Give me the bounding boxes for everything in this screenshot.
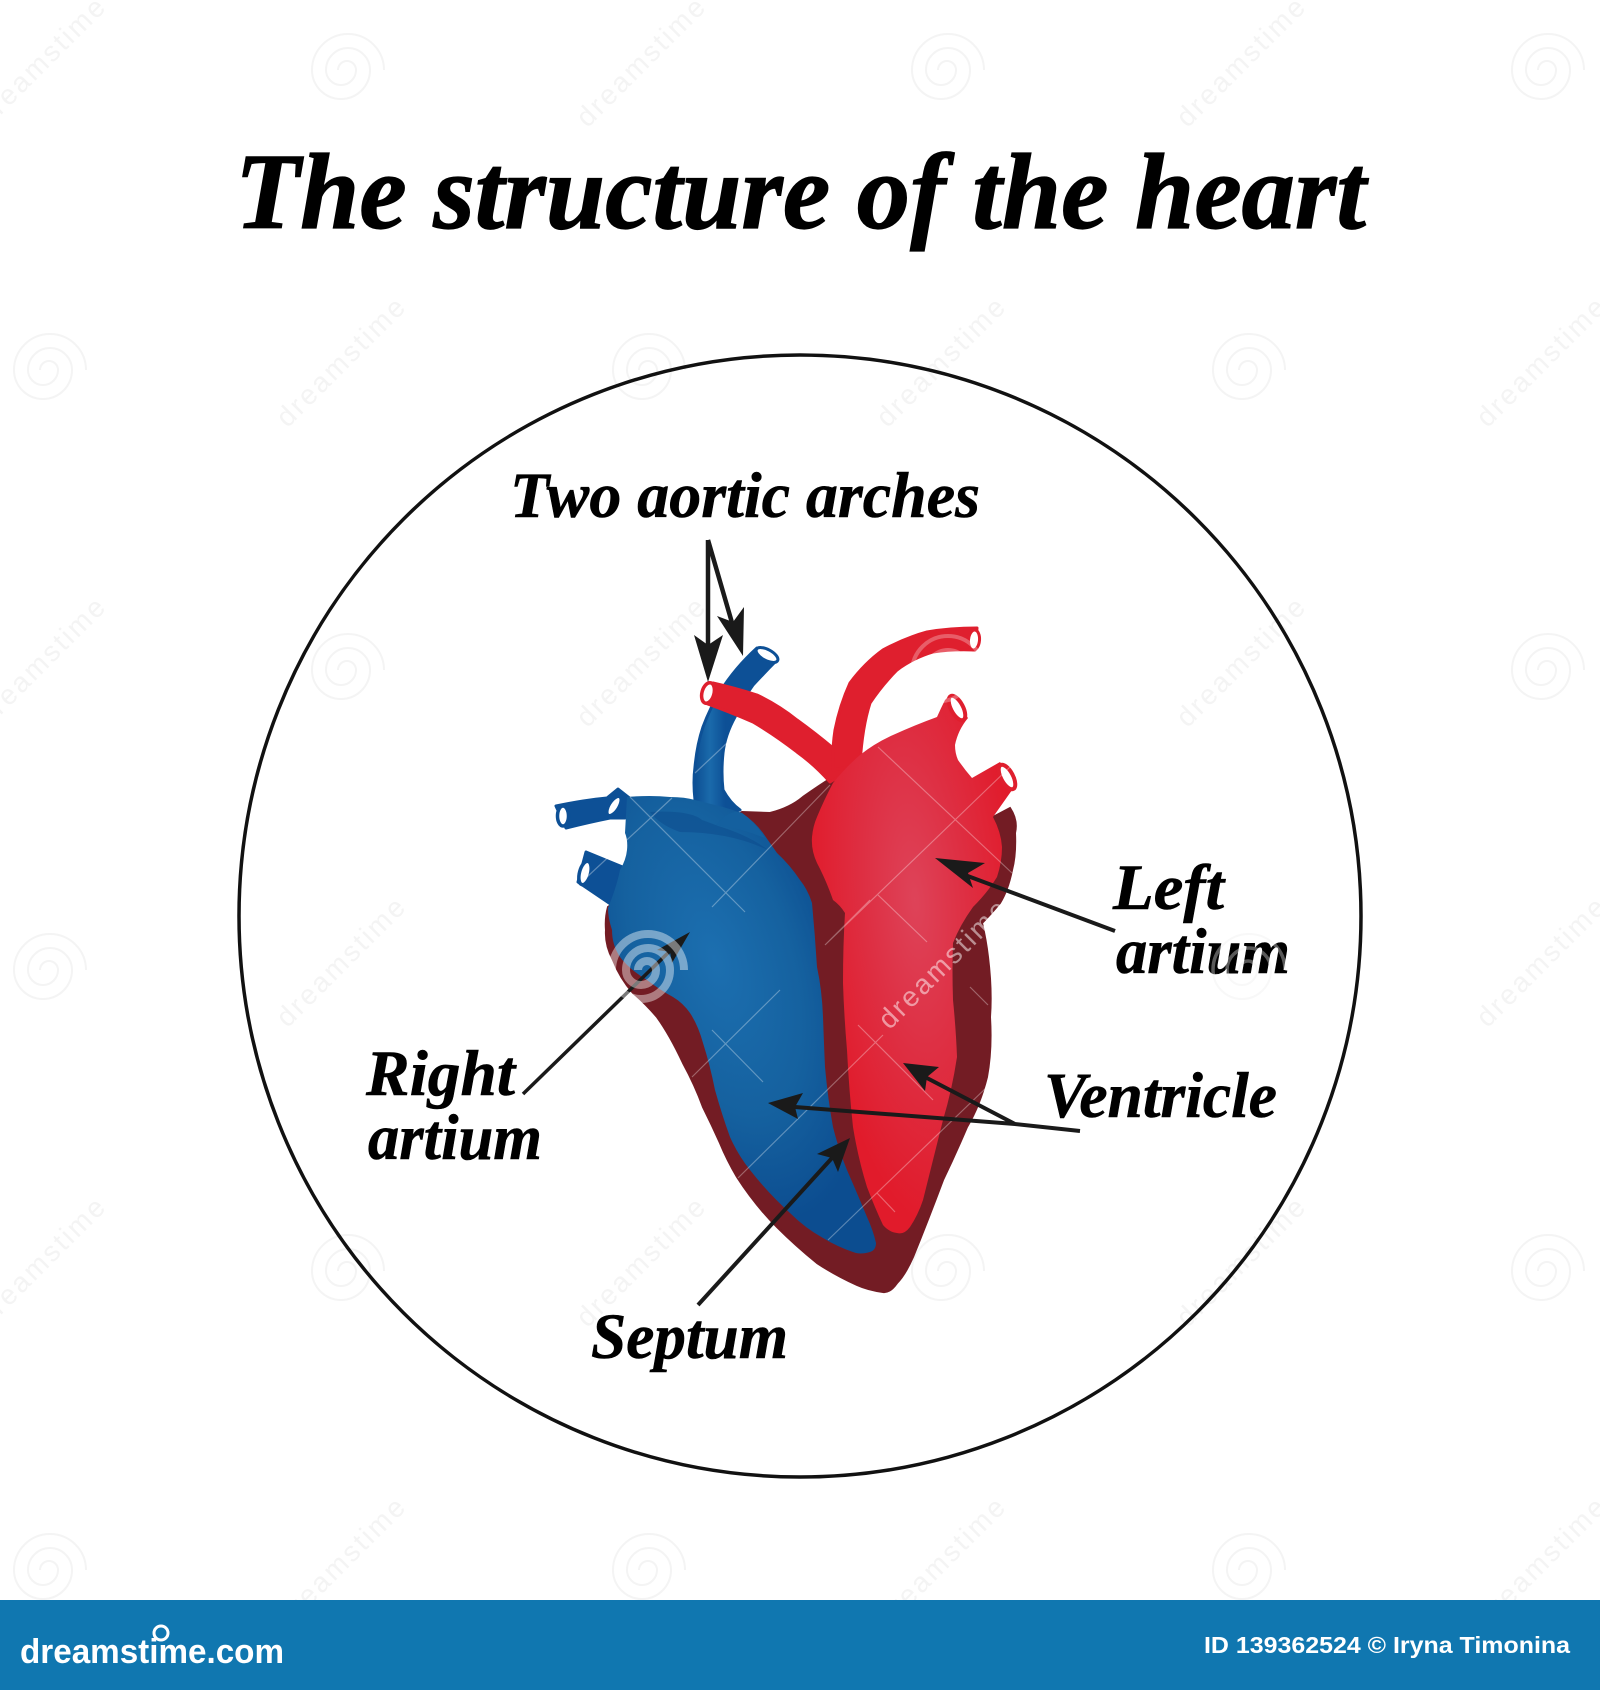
label: left artium: artium [1116,916,1290,988]
label: two aortic arches: Two aortic arches [510,460,980,532]
watermark pattern: dreamstime [870,290,1013,433]
heart watermark overlays [612,636,1285,999]
red vessel openings on chamber [945,693,969,723]
arch join highlight [716,812,765,838]
watermark pattern: dreamstime [570,590,713,733]
label: right artium: artium [368,1102,542,1174]
footer logo: dreamstime.com [20,1633,284,1671]
right side chambers, blue [608,796,876,1254]
label: right artium [365,1038,542,1174]
watermark pattern: dreamstime [270,890,413,1033]
arrows: two aortic arches [694,540,744,682]
arrows: ventricle [768,1063,1080,1131]
title: The structure of the heart [235,133,1369,252]
blue vessel openings [558,806,568,826]
label: ventricle: Ventricle [1044,1060,1277,1132]
arrow: left artium [935,858,1115,931]
label: right artium: Right [365,1038,517,1110]
watermark grid lines on heart [587,743,1012,1240]
label: septum: Septum [591,1301,788,1373]
heart wall [606,777,1016,1292]
arrow: right artium [523,932,690,1094]
red vessel openings [699,681,717,705]
watermark pattern: dreamstime [570,1190,713,1333]
footer bar [0,1600,1600,1690]
label: left artium [1112,852,1290,988]
watermark pattern: dreamstime [270,1490,413,1633]
left side chambers, red [812,695,1017,1233]
watermark pattern: dreamstime [1170,1190,1313,1333]
heart illustration [556,628,1019,1292]
arrow: septum [698,1138,850,1305]
red vessels [699,628,980,782]
blue vessels [556,645,780,905]
footer credit: ID 139362524 © Iryna Timonina [1204,1632,1570,1658]
blue top shading [650,812,768,850]
circle frame [239,355,1361,1477]
watermark pattern: dreamstime [270,290,413,433]
watermark pattern: dreamstime [870,1490,1013,1633]
watermark word on heart: dreamstime [872,892,1015,1035]
footer logo mark [154,1626,168,1640]
label: left artium: Left [1112,852,1226,924]
watermark pattern: dreamstime [1170,590,1313,733]
